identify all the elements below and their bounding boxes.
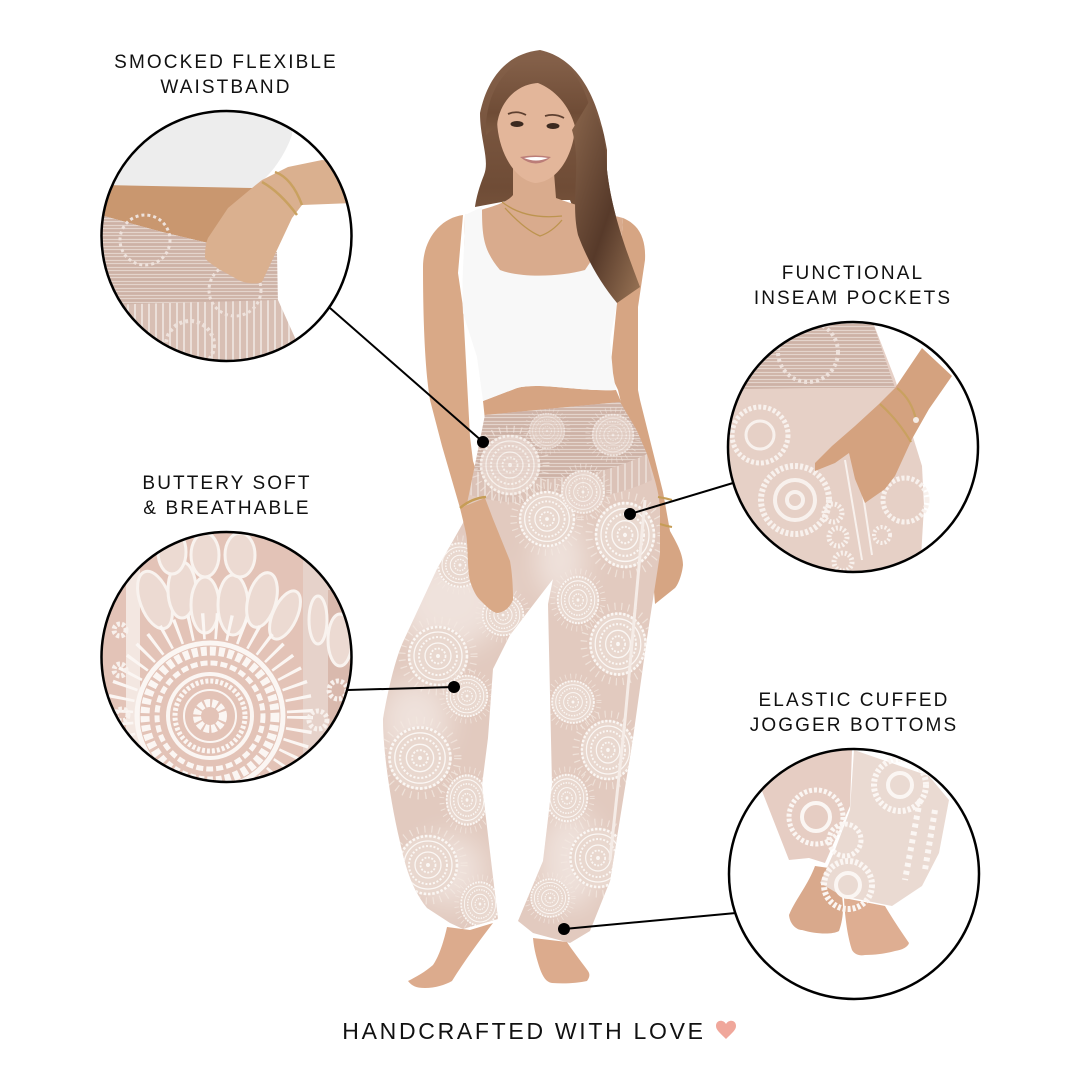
hand and forearm <box>815 348 952 503</box>
pants <box>726 320 924 575</box>
model figure <box>370 50 683 988</box>
callout: elastic cuffed jogger bottoms <box>558 690 981 1001</box>
pointer line <box>348 681 460 693</box>
heading <box>754 263 952 309</box>
neck and chest <box>463 160 623 300</box>
pleats <box>470 454 652 503</box>
white top <box>100 110 292 188</box>
heading <box>750 690 958 736</box>
heading: ELASTIC CUFFED <box>759 690 949 711</box>
mandalas <box>382 409 661 931</box>
front hand <box>460 498 513 613</box>
footer tagline: HANDCRAFTED WITH LOVE <box>342 1018 706 1044</box>
heading: WAISTBAND <box>160 77 292 98</box>
left leg <box>762 750 852 863</box>
right leg <box>820 750 949 906</box>
heading: INSEAM POCKETS <box>754 288 952 309</box>
heading <box>142 473 312 519</box>
icon: heart <box>716 1021 736 1039</box>
detail circle <box>727 747 981 1001</box>
detail circle <box>100 110 355 369</box>
left stripe <box>126 568 140 746</box>
large mandala <box>120 626 300 806</box>
washed highlights <box>380 520 600 910</box>
right arm <box>610 218 683 604</box>
heading <box>114 52 338 98</box>
face <box>497 83 575 183</box>
heading: JOGGER BOTTOMS <box>750 715 958 736</box>
left foot <box>789 866 843 934</box>
eyes, brows and mouth <box>508 112 564 164</box>
hair front strands <box>572 100 640 303</box>
pointer line <box>558 913 736 935</box>
bracelets <box>262 172 302 215</box>
hair back <box>475 50 640 300</box>
heading: SMOCKED FLEXIBLE <box>114 52 338 73</box>
callout: buttery soft and breathable <box>100 473 460 806</box>
smocked waistband <box>743 324 895 390</box>
pleats <box>124 300 296 360</box>
pointer line <box>624 483 733 520</box>
right foot <box>844 898 909 955</box>
heading: FUNCTIONAL <box>782 263 924 284</box>
pants <box>383 402 660 943</box>
heading: BUTTERY SOFT <box>142 473 312 494</box>
feet <box>408 923 493 988</box>
left arm <box>423 215 485 508</box>
hand and forearm <box>205 160 355 283</box>
detail circle <box>100 530 354 806</box>
callout: functional inseam pockets <box>624 263 980 575</box>
bracelets <box>880 388 916 442</box>
smocked waistband <box>100 215 278 310</box>
paisley leaves <box>131 530 352 666</box>
crop top <box>462 207 617 401</box>
bracelets <box>460 497 486 508</box>
hair fringe <box>486 56 594 160</box>
waistband smocking <box>470 400 647 479</box>
right fold panel <box>303 560 330 754</box>
left stripe flowers <box>114 624 347 729</box>
midriff <box>483 386 622 420</box>
detail circle <box>726 320 980 575</box>
midriff <box>104 185 252 242</box>
pointer line <box>330 308 489 448</box>
fabric mandalas <box>732 407 927 571</box>
fabric mandalas <box>789 759 935 909</box>
necklace <box>502 202 562 236</box>
callout: smocked flexible waistband <box>100 52 489 448</box>
heading: & BREATHABLE <box>143 498 311 519</box>
